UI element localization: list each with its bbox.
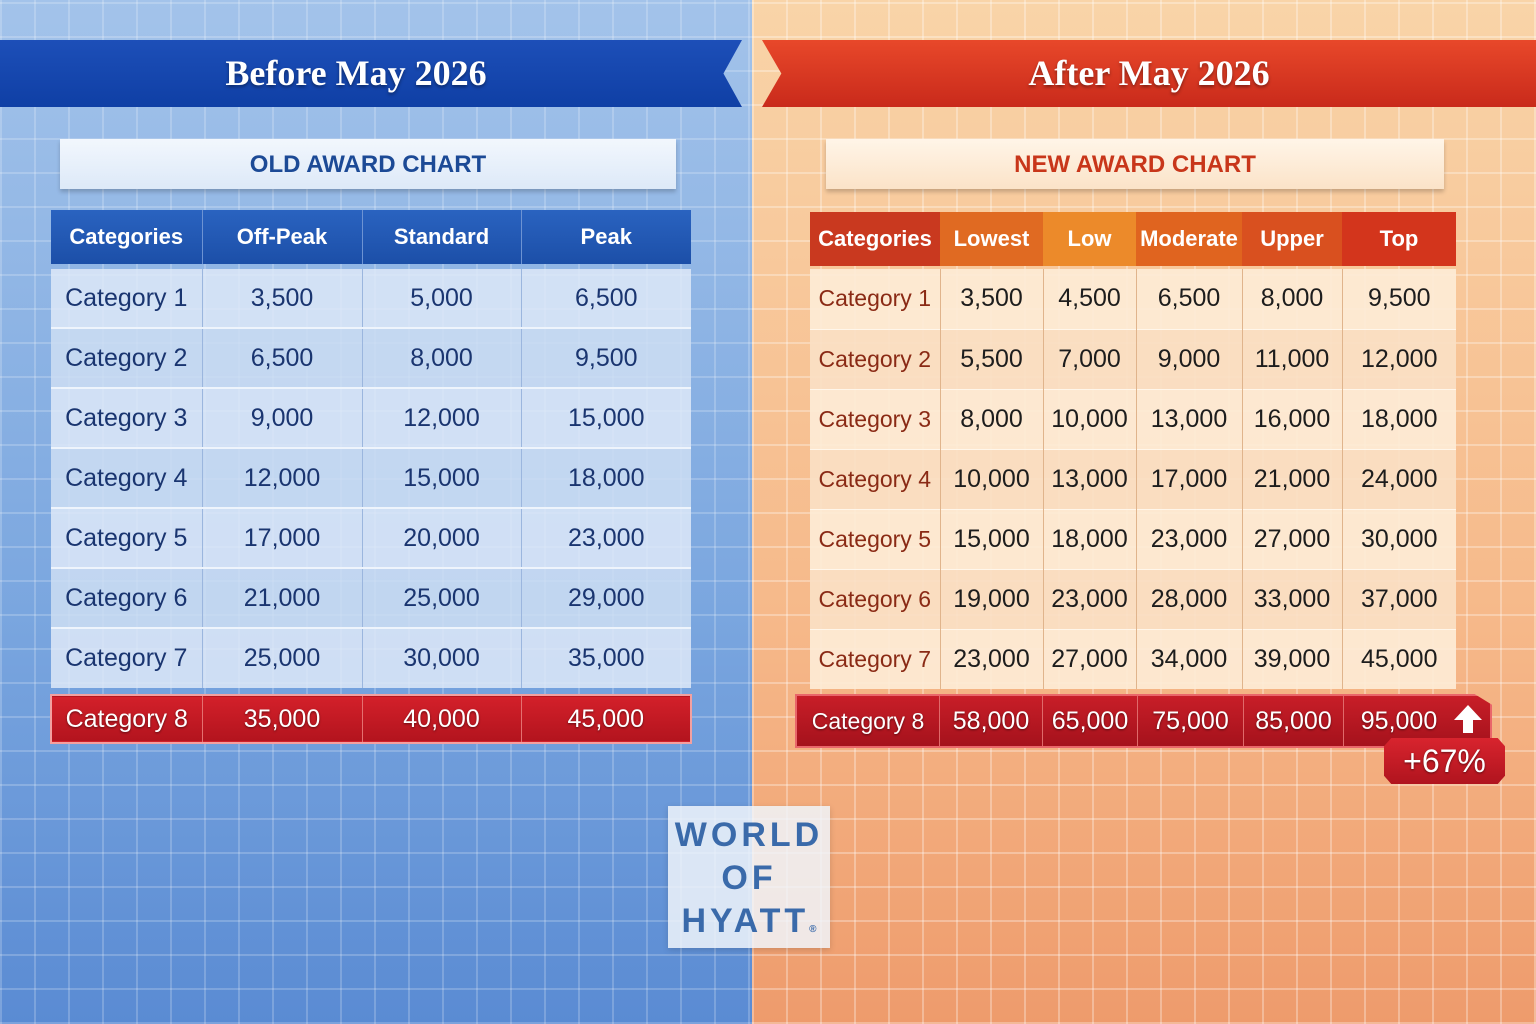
table: old award chart: 29,000 xyxy=(568,584,644,612)
highlighted row: category 8 new xyxy=(795,694,1492,748)
table: new award chart: Category 4 xyxy=(818,466,931,492)
table: new award chart: 13,000 xyxy=(1051,464,1128,492)
highlighted row: category 8 new: 58,000 xyxy=(953,707,1029,735)
banner: Before May 2026 xyxy=(0,40,742,107)
table: new award chart: 15,000 xyxy=(953,524,1030,552)
table: new award chart: 23,000 xyxy=(1051,584,1128,612)
table: new award chart: 9,000 xyxy=(1158,344,1220,372)
badge: +67%: +67% xyxy=(1403,743,1486,779)
table: new award chart: 27,000 xyxy=(1254,524,1330,552)
table: new award chart: 16,000 xyxy=(1254,404,1330,432)
table: new award chart: 18,000 xyxy=(1051,524,1128,552)
table: new award chart: Categories xyxy=(818,226,932,251)
table: new award chart: 30,000 xyxy=(1361,524,1437,552)
panel: before (left background) xyxy=(0,0,752,1024)
table: old award chart: 45,000 xyxy=(568,704,644,732)
table: old award chart: 25,000 xyxy=(403,584,480,612)
table: old award chart: 9,500 xyxy=(575,344,638,372)
table: old award chart: Peak xyxy=(581,224,632,249)
table: new award chart: Category 6 xyxy=(818,586,931,612)
logo: World of Hyatt: HYATT® xyxy=(681,902,817,940)
table: old award chart: Category 6 xyxy=(65,584,187,612)
table: old award chart: 8,000 xyxy=(410,344,473,372)
table: new award chart: 13,000 xyxy=(1151,404,1227,432)
table: old award chart: 21,000 xyxy=(244,584,320,612)
table: old award chart: 23,000 xyxy=(568,524,644,552)
table: new award chart: Category 5 xyxy=(818,526,931,552)
table: old award chart: 3,500 xyxy=(251,284,313,312)
table: new award chart: 45,000 xyxy=(1361,645,1437,673)
highlighted row: category 8 new: 85,000 xyxy=(1255,707,1332,735)
table: new award chart: Upper xyxy=(1260,226,1324,251)
table: new award chart: 8,000 xyxy=(1261,284,1323,312)
table: old award chart: 17,000 xyxy=(244,524,320,552)
logo: World of Hyatt: WORLD xyxy=(675,816,823,854)
table: old award chart: 6,500 xyxy=(251,344,313,372)
table: new award chart: 4,500 xyxy=(1058,284,1121,312)
subheading: new award chart xyxy=(826,139,1444,189)
table: new award chart: 3,500 xyxy=(960,284,1023,312)
table: new award chart: 23,000 xyxy=(953,645,1030,673)
logo: World of Hyatt: OF xyxy=(721,859,777,897)
table: new award chart: 5,500 xyxy=(960,344,1023,372)
table: new award chart: 19,000 xyxy=(953,584,1030,612)
table: new award chart: Category 1 xyxy=(818,285,931,311)
table: new award chart: 7,000 xyxy=(1058,344,1121,372)
table: old award chart: Category 1 xyxy=(65,284,187,312)
table: new award chart: Top xyxy=(1380,226,1418,251)
table: old award chart: 9,000 xyxy=(251,404,313,432)
table: old award chart: Category 5 xyxy=(65,524,187,552)
table: new award chart: 23,000 xyxy=(1151,524,1227,552)
table: old award chart: Category 3 xyxy=(65,404,187,432)
banner: Before May 2026: Before May 2026 xyxy=(225,53,487,93)
table: new award chart: 39,000 xyxy=(1254,645,1330,673)
table: old award chart: Standard xyxy=(394,224,489,249)
table: old award chart: 12,000 xyxy=(244,464,320,492)
badge: +67% xyxy=(1384,738,1505,784)
logo: World of Hyatt xyxy=(668,806,830,948)
table: old award chart: Category 8 xyxy=(66,704,188,732)
subheading: old award chart: OLD AWARD CHART xyxy=(250,151,486,178)
table: new award chart: Low xyxy=(1068,226,1112,251)
highlighted row: category 8 new: Category 8 xyxy=(812,708,924,734)
table: old award chart: 5,000 xyxy=(410,284,473,312)
subheading: old award chart xyxy=(60,139,676,189)
table: new award chart: 10,000 xyxy=(1051,404,1128,432)
table: old award chart: 35,000 xyxy=(244,704,320,732)
table: old award chart: 40,000 xyxy=(403,704,480,732)
table: old award chart: Off-Peak xyxy=(237,224,327,249)
banner: After May 2026 xyxy=(762,40,1536,107)
table: new award chart: Category 7 xyxy=(818,646,931,672)
table: new award chart: 9,500 xyxy=(1368,284,1431,312)
table: old award chart: 20,000 xyxy=(403,524,480,552)
table: new award chart: 34,000 xyxy=(1151,645,1227,673)
table: old award chart: Category 2 xyxy=(65,344,187,372)
table: new award chart: Moderate xyxy=(1140,226,1238,251)
table: new award chart: 21,000 xyxy=(1254,464,1330,492)
table: new award chart xyxy=(810,212,1456,689)
highlighted row: category 8 new: 65,000 xyxy=(1052,707,1128,735)
panel: after (right background) xyxy=(752,0,1536,1024)
table: new award chart: 27,000 xyxy=(1051,645,1128,673)
table: new award chart: 24,000 xyxy=(1361,464,1437,492)
highlighted row: category 8 new: 95,000 xyxy=(1361,707,1437,735)
table: new award chart: 17,000 xyxy=(1151,464,1227,492)
table: new award chart: Lowest xyxy=(954,226,1029,251)
table: old award chart xyxy=(50,210,692,744)
table: old award chart: Categories xyxy=(69,224,183,249)
table: old award chart: 15,000 xyxy=(568,404,644,432)
table: old award chart: 35,000 xyxy=(568,644,644,672)
table: old award chart: 12,000 xyxy=(403,404,480,432)
table: old award chart: 6,500 xyxy=(575,284,638,312)
table: new award chart: 37,000 xyxy=(1361,584,1437,612)
table: new award chart: 10,000 xyxy=(953,464,1030,492)
table: old award chart: 18,000 xyxy=(568,464,644,492)
icon: up arrow xyxy=(1454,705,1482,733)
highlighted row: category 8 new: 75,000 xyxy=(1152,707,1229,735)
table: old award chart: 30,000 xyxy=(403,644,480,672)
table: new award chart: 33,000 xyxy=(1254,584,1330,612)
table: new award chart: 8,000 xyxy=(960,404,1023,432)
table: new award chart: 18,000 xyxy=(1361,404,1437,432)
table: old award chart: 25,000 xyxy=(244,644,320,672)
table: new award chart: 12,000 xyxy=(1361,344,1437,372)
table: new award chart: 11,000 xyxy=(1255,344,1329,372)
table: new award chart: 6,500 xyxy=(1158,284,1220,312)
table: old award chart: Category 7 xyxy=(65,644,187,672)
banner: After May 2026: After May 2026 xyxy=(1028,53,1270,93)
table: new award chart: 28,000 xyxy=(1151,584,1227,612)
subheading: new award chart: NEW AWARD CHART xyxy=(1014,151,1256,178)
table: new award chart: Category 2 xyxy=(818,346,931,372)
table: new award chart: Category 3 xyxy=(818,406,931,432)
table: old award chart: 15,000 xyxy=(403,464,480,492)
table: old award chart: Category 4 xyxy=(65,464,187,492)
